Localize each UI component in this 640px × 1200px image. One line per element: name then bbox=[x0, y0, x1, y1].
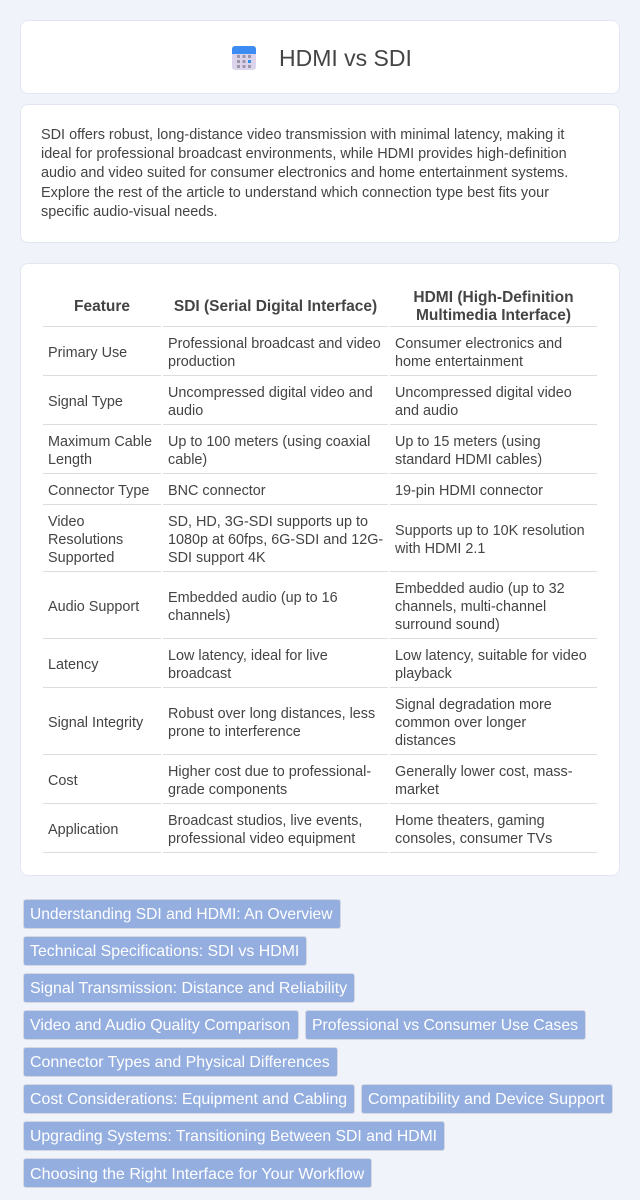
comparison table: Up to 100 meters (using coaxial bbox=[168, 434, 370, 450]
comparison table: HDMI (High-Definition bbox=[413, 289, 574, 306]
comparison table: Resolutions bbox=[48, 532, 123, 548]
tag: quality comparison: Video and Audio Quality Comparison bbox=[30, 1017, 290, 1034]
comparison table: Low latency, ideal for live bbox=[168, 648, 328, 664]
comparison table: Video bbox=[48, 514, 85, 530]
tag: upgrading bbox=[23, 1121, 445, 1151]
comparison table: Signal Integrity bbox=[48, 715, 143, 731]
comparison table: Broadcast studios, live events, bbox=[168, 813, 362, 829]
comparison table: 19-pin HDMI connector bbox=[395, 483, 543, 499]
tag: cost bbox=[23, 1084, 355, 1114]
comparison table: Supported bbox=[48, 550, 114, 566]
tag: quality comparison bbox=[23, 1010, 299, 1040]
comparison table: Maximum Cable bbox=[48, 434, 152, 450]
comparison table: Higher cost due to professional- bbox=[168, 764, 371, 780]
comparison table: audio bbox=[168, 403, 203, 419]
comparison table: Connector Type bbox=[48, 483, 149, 499]
intro text: ideal for professional broadcast environments, while HDMI provides high-definition bbox=[41, 146, 567, 162]
intro panel bbox=[20, 104, 620, 243]
comparison table: channels) bbox=[168, 608, 230, 624]
comparison table: Uncompressed digital video bbox=[395, 385, 572, 401]
comparison table: professional video equipment bbox=[168, 831, 355, 847]
icon: calendar bbox=[232, 46, 256, 70]
comparison table: Latency bbox=[48, 657, 98, 673]
comparison table panel bbox=[20, 263, 620, 876]
comparison table: common over longer bbox=[395, 715, 526, 731]
tag: choosing: Choosing the Right Interface for Your Workflow bbox=[30, 1165, 364, 1183]
tag: compatibility bbox=[361, 1084, 613, 1114]
comparison table: Audio Support bbox=[48, 599, 139, 615]
comparison table: with HDMI 2.1 bbox=[395, 541, 485, 557]
comparison table: SDI support 4K bbox=[168, 550, 266, 566]
comparison table: Feature bbox=[74, 298, 130, 315]
comparison table: Professional broadcast and video bbox=[168, 336, 381, 352]
comparison table bbox=[43, 289, 597, 853]
title: HDMI vs SDI bbox=[279, 45, 412, 71]
comparison table: Signal Type bbox=[48, 394, 123, 410]
comparison table: Embedded audio (up to 32 bbox=[395, 581, 565, 597]
tag: overview bbox=[23, 899, 341, 929]
comparison table: prone to interference bbox=[168, 724, 301, 740]
comparison table: Robust over long distances, less bbox=[168, 706, 375, 722]
tag: signal transmission bbox=[23, 973, 355, 1003]
comparison table: surround sound) bbox=[395, 617, 500, 633]
comparison table: Multimedia Interface) bbox=[416, 307, 571, 324]
comparison table: standard HDMI cables) bbox=[395, 452, 542, 468]
tag: use cases bbox=[305, 1010, 586, 1040]
comparison table: Uncompressed digital video and bbox=[168, 385, 373, 401]
comparison table: channels, multi-channel bbox=[395, 599, 546, 615]
title card bbox=[20, 20, 620, 94]
tag: use cases: Professional vs Consumer Use Cases bbox=[312, 1017, 578, 1034]
tag: cost: Cost Considerations: Equipment and Cabling bbox=[30, 1091, 347, 1108]
comparison table: Primary Use bbox=[48, 345, 127, 361]
comparison table: Application bbox=[48, 822, 118, 838]
comparison table: Supports up to 10K resolution bbox=[395, 523, 585, 539]
comparison table: Home theaters, gaming bbox=[395, 813, 545, 829]
comparison table: Cost bbox=[48, 773, 78, 789]
comparison table: grade components bbox=[168, 782, 287, 798]
intro text bbox=[41, 127, 568, 220]
comparison table: cable) bbox=[168, 452, 207, 468]
tag: connector types bbox=[23, 1047, 338, 1077]
tag: compatibility: Compatibility and Device Support bbox=[368, 1091, 605, 1108]
intro text: audio and video suited for consumer electronics and home entertainment systems. bbox=[41, 165, 568, 181]
tag: upgrading: Upgrading Systems: Transitioning Between SDI and HDMI bbox=[30, 1128, 437, 1145]
tag: specifications bbox=[23, 936, 307, 966]
comparison table: Low latency, suitable for video bbox=[395, 648, 587, 664]
comparison table: Up to 15 meters (using bbox=[395, 434, 541, 450]
tag: overview: Understanding SDI and HDMI: An Overview bbox=[30, 906, 332, 923]
comparison table: consoles, consumer TVs bbox=[395, 831, 552, 847]
comparison table: home entertainment bbox=[395, 354, 523, 370]
comparison table: Embedded audio (up to 16 bbox=[168, 590, 338, 606]
comparison table: distances bbox=[395, 733, 456, 749]
comparison table: production bbox=[168, 354, 235, 370]
comparison table: SD, HD, 3G-SDI supports up to bbox=[168, 514, 368, 530]
comparison table: playback bbox=[395, 666, 452, 682]
intro text: SDI offers robust, long-distance video transmission with minimal latency, making it bbox=[41, 127, 564, 143]
tag: specifications: Technical Specifications: SDI vs HDMI bbox=[30, 943, 299, 960]
comparison table: Generally lower cost, mass- bbox=[395, 764, 573, 780]
tag: choosing bbox=[23, 1158, 372, 1188]
comparison table: Consumer electronics and bbox=[395, 336, 562, 352]
comparison table: market bbox=[395, 782, 439, 798]
intro text: specific audio-visual needs. bbox=[41, 204, 218, 220]
comparison table: Signal degradation more bbox=[395, 697, 552, 713]
tag: connector types: Connector Types and Physical Differences bbox=[30, 1054, 330, 1071]
comparison table: Length bbox=[48, 452, 92, 468]
comparison table: 1080p at 60fps, 6G-SDI and 12G- bbox=[168, 532, 383, 548]
comparison table: BNC connector bbox=[168, 483, 266, 499]
tag: signal transmission: Signal Transmission: Distance and Reliability bbox=[30, 980, 347, 997]
comparison table: broadcast bbox=[168, 666, 231, 682]
comparison table: and audio bbox=[395, 403, 458, 419]
intro text: Explore the rest of the article to understand which connection type best fits your bbox=[41, 185, 549, 201]
comparison table: SDI (Serial Digital Interface) bbox=[174, 298, 377, 315]
